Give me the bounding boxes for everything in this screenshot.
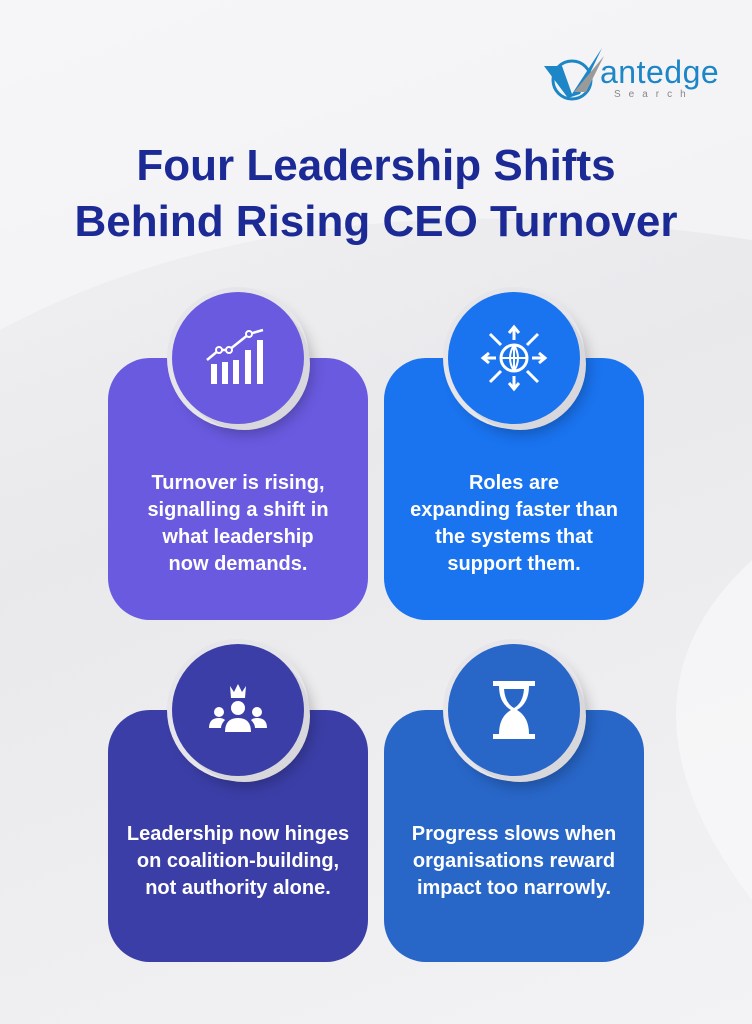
panel: progress slows — [384, 710, 644, 962]
panel: roles expanding — [384, 358, 644, 620]
text: expanding faster than — [410, 499, 618, 521]
text: Leadership now hinges — [127, 823, 349, 845]
text: organisations reward — [413, 850, 615, 872]
title — [74, 141, 678, 246]
text — [127, 823, 349, 899]
icon: people crown — [172, 644, 304, 776]
text — [412, 823, 616, 899]
title: Four Leadership Shifts — [136, 141, 616, 190]
text: what leadership — [162, 526, 314, 548]
text: on coalition-building, — [137, 850, 339, 872]
text: Progress slows when — [412, 823, 616, 845]
icon: globe arrows — [448, 292, 580, 424]
logo: antedge — [600, 54, 719, 90]
text: Roles are — [469, 472, 559, 494]
text: Turnover is rising, — [152, 472, 324, 494]
text: now demands. — [169, 553, 307, 575]
icon: hourglass — [448, 644, 580, 776]
icon: chart circle — [172, 292, 304, 424]
text: signalling a shift in — [147, 499, 329, 521]
text — [410, 472, 618, 575]
panel: coalition building — [108, 710, 368, 962]
text: support them. — [447, 553, 581, 575]
text: not authority alone. — [145, 877, 331, 899]
logo: Search — [614, 89, 694, 100]
text: impact too narrowly. — [417, 877, 611, 899]
text — [147, 472, 329, 575]
logo — [544, 48, 719, 100]
panel: turnover rising — [108, 358, 368, 620]
title: Behind Rising CEO Turnover — [74, 197, 678, 246]
text: the systems that — [435, 526, 593, 548]
